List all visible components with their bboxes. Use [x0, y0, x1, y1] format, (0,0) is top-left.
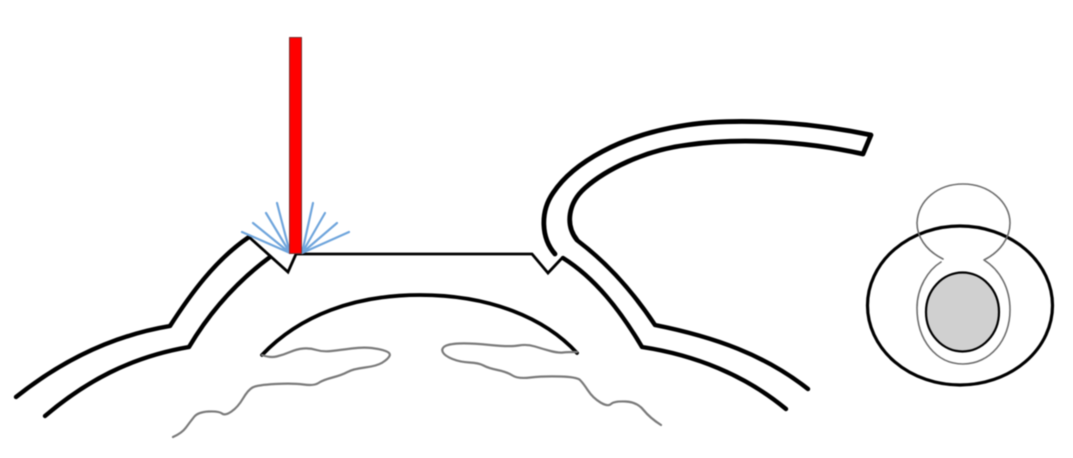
cornea: left section: [16, 237, 270, 416]
front view: flap outline: [917, 184, 1010, 364]
iris: left: [173, 348, 390, 437]
iris: right: [442, 343, 661, 425]
incision line: [249, 237, 563, 273]
front view: eye outline: [868, 226, 1052, 385]
cornea: right section: [563, 241, 808, 409]
front view: pupil: [926, 272, 999, 352]
corneal flap: [544, 121, 871, 254]
laser spray rays: [242, 203, 349, 253]
lens: [262, 295, 577, 355]
laser beam: [290, 38, 302, 254]
